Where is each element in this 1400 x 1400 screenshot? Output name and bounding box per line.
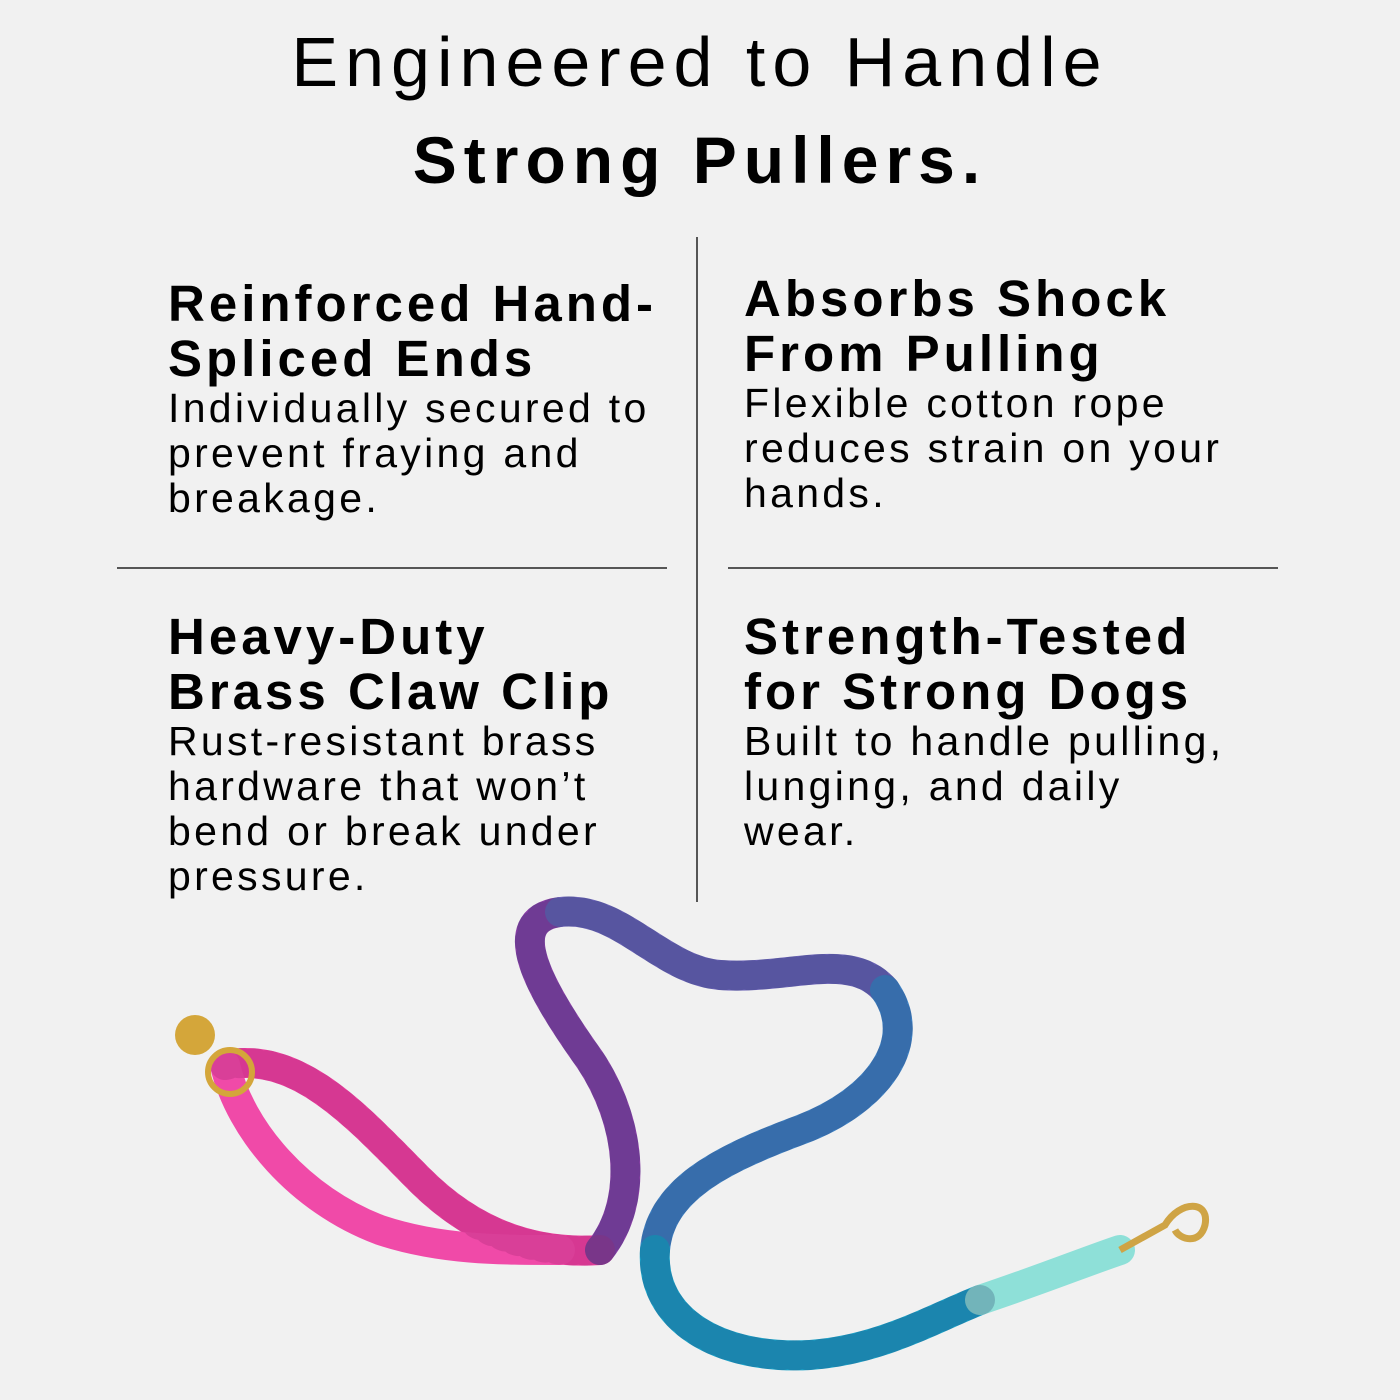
panel: absorbs shock: reduces strain on your <box>744 425 1222 471</box>
panel: absorbs shock <box>744 270 1222 516</box>
panel: reinforced ends: prevent fraying and <box>168 430 582 476</box>
leash illustration <box>175 896 1210 1370</box>
panel: strength tested: for Strong Dogs <box>744 663 1192 720</box>
panel: reinforced ends: Spliced Ends <box>168 330 536 387</box>
panel: strength tested: wear. <box>744 808 858 854</box>
panel: strength tested: Strength-Tested <box>744 608 1191 665</box>
panel: reinforced ends <box>168 275 657 521</box>
title: Engineered to Handle <box>291 23 1109 101</box>
title <box>291 23 1109 197</box>
panel: brass clip: Heavy-Duty <box>168 608 489 665</box>
panel: strength tested <box>744 608 1224 854</box>
panel: brass clip: pressure. <box>168 853 369 899</box>
panel: reinforced ends: Reinforced Hand- <box>168 275 657 332</box>
panel: brass clip: bend or break under <box>168 808 600 854</box>
icon: brass clip <box>1120 1206 1206 1250</box>
panel: brass clip: hardware that won’t <box>168 763 589 809</box>
title: Strong Pullers. <box>413 123 987 197</box>
panel: reinforced ends: breakage. <box>168 475 380 521</box>
panel: reinforced ends: Individually secured to <box>168 385 650 431</box>
panel: brass clip: Brass Claw Clip <box>168 663 613 720</box>
panel: absorbs shock: hands. <box>744 470 887 516</box>
panel: strength tested: Built to handle pulling, <box>744 718 1224 764</box>
panel: absorbs shock: Flexible cotton rope <box>744 380 1168 426</box>
icon: brass ring <box>208 1050 252 1094</box>
panel: strength tested: lunging, and daily <box>744 763 1123 809</box>
panel: absorbs shock: Absorbs Shock <box>744 270 1170 327</box>
panel: absorbs shock: From Pulling <box>744 325 1104 382</box>
panel: brass clip: Rust-resistant brass <box>168 718 599 764</box>
panel: brass clip <box>168 608 613 899</box>
